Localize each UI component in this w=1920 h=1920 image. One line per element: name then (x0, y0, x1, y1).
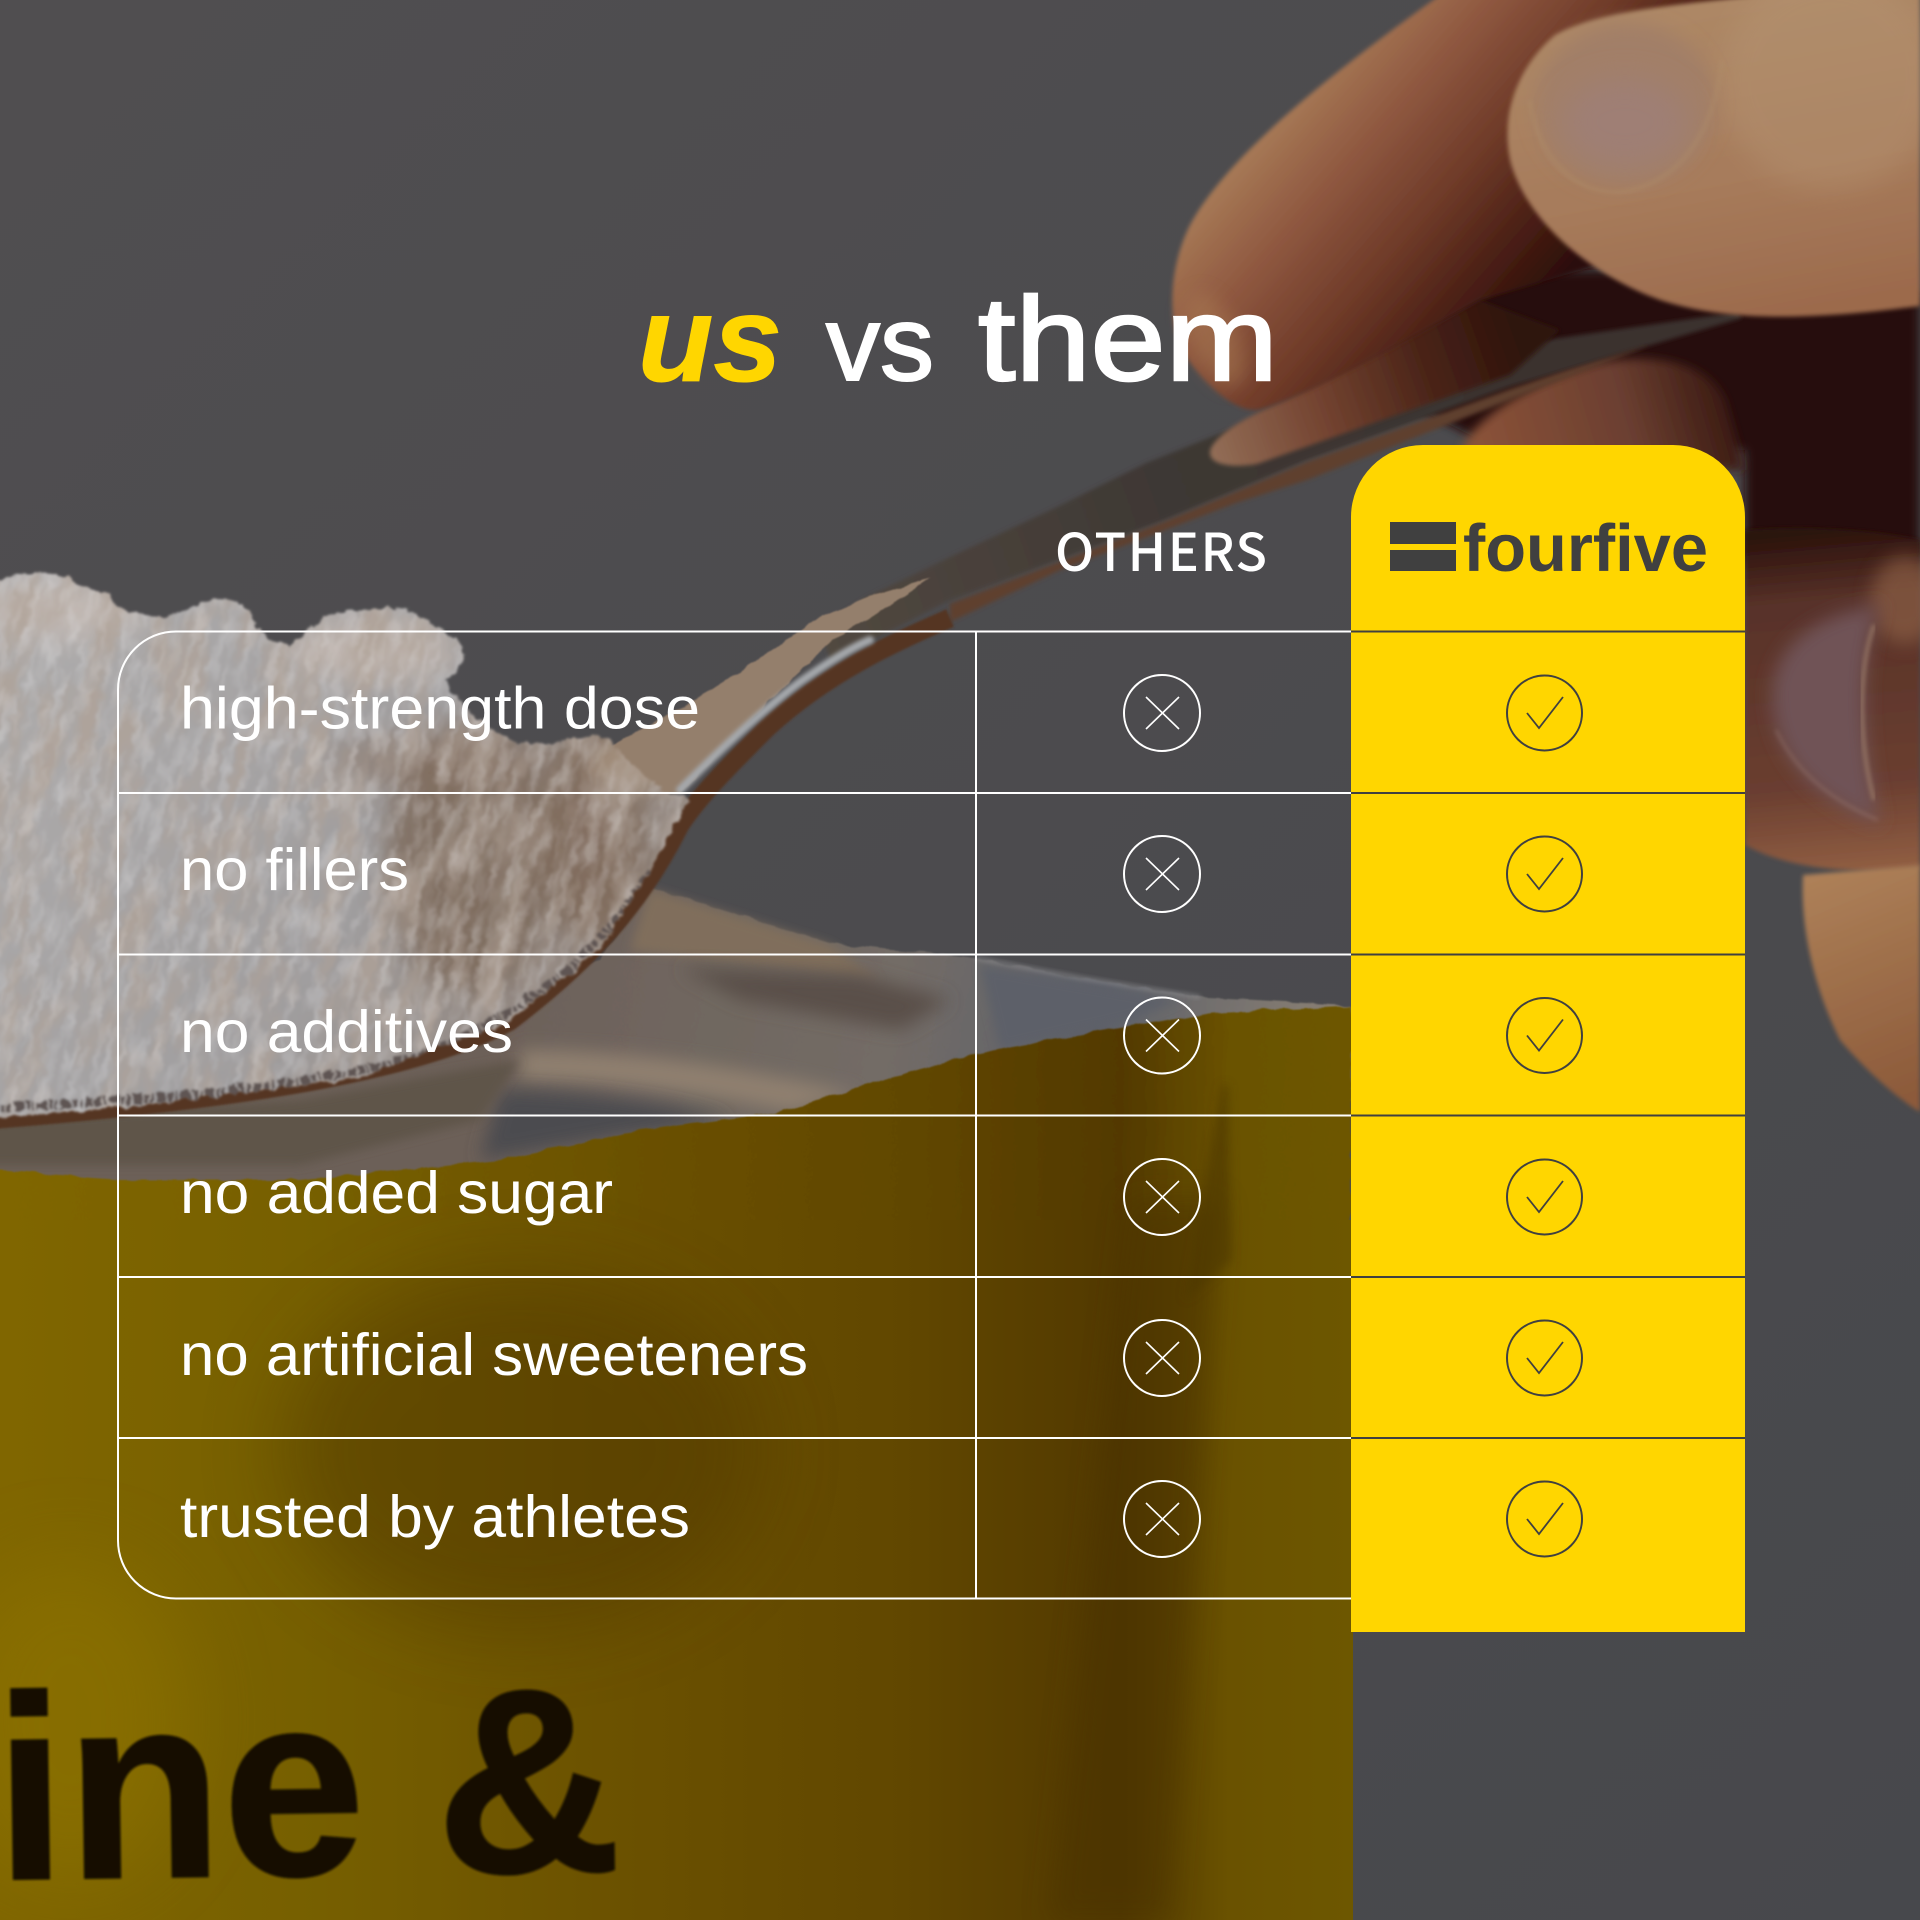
powder streaks (0, 574, 680, 1084)
yellow pouch (0, 1005, 1353, 1920)
nail rim (1530, 60, 1722, 192)
steel highlight (680, 640, 870, 790)
row: high-strength dose (180, 675, 1582, 751)
speckled powder edge (0, 870, 650, 1110)
brown patch (385, 725, 555, 995)
row: trusted by athletes (180, 1481, 1582, 1557)
handle steel (820, 312, 1742, 660)
icon: check (1507, 1320, 1582, 1396)
feature label: no fillers (180, 837, 409, 903)
torn light edge (975, 958, 1200, 997)
pouch body (0, 1220, 1353, 1920)
row: no additives (180, 998, 1582, 1074)
nail plate (1524, 11, 1726, 199)
crest glow left (0, 580, 150, 640)
index finger (1172, 0, 1800, 410)
powder on spoon neck (610, 578, 930, 800)
icon: check (1507, 836, 1582, 912)
yellow fourfive column (1351, 445, 1745, 1632)
blue grey pane (980, 965, 1180, 1050)
title (638, 271, 1278, 407)
spoon handle (820, 300, 1742, 660)
pouch shadow fold right (1050, 1200, 1220, 1920)
nail edge (1776, 730, 1878, 820)
brown patch right (535, 720, 645, 940)
middle finger behind spoon (1462, 359, 1745, 470)
icon: check (1507, 676, 1582, 750)
pouch crease (1185, 1085, 1232, 1300)
feature label: no artificial sweeteners (180, 1322, 808, 1388)
pouch shadow fold left (280, 1270, 760, 1630)
finger highlight (1871, 556, 1920, 644)
pouch opening interior (0, 887, 1351, 1190)
shadow inside the hand (1300, 270, 1920, 560)
tan neck powder (586, 740, 653, 796)
spoon rim (0, 618, 950, 1122)
dark shadow (480, 1090, 730, 1160)
comparison table frame (118, 632, 1351, 1598)
thumbnail (1524, 11, 1726, 199)
logo bars (1390, 522, 1456, 571)
column header: others: OTHERS (1055, 511, 1267, 586)
thumb lit area (1720, 0, 1920, 190)
tan crest (630, 890, 880, 980)
fingertip highlight (1172, 285, 1258, 395)
icon: cross (1124, 1159, 1200, 1235)
powder sparkle (0, 574, 682, 1116)
feature label: high-strength dose (180, 676, 700, 742)
thumb (1507, 0, 1920, 317)
lower finger (1803, 865, 1920, 1112)
right finger with nail (1745, 528, 1920, 871)
column panel (1351, 445, 1745, 1632)
interior base (0, 887, 1351, 1190)
lit band left (0, 1560, 190, 1880)
icon: check (1507, 1160, 1582, 1234)
fingertip reflection (1210, 300, 1560, 466)
crest glow (280, 618, 460, 682)
cuticle (1862, 625, 1874, 800)
row: no added sugar (180, 1159, 1582, 1235)
icon: check (1507, 998, 1582, 1073)
handle lower reflection (950, 345, 1650, 622)
title word: us: us (638, 271, 782, 407)
feature label: trusted by athletes (180, 1484, 690, 1550)
icon: cross (1124, 675, 1200, 751)
row: no artificial sweeteners (180, 1320, 1582, 1396)
nail centre (1563, 78, 1687, 166)
feature label: no additives (180, 999, 513, 1065)
tan streak (520, 1050, 860, 1112)
pouch torn top edge (0, 1005, 1351, 1260)
fourfive logo (1390, 511, 1708, 586)
powder scoop (0, 570, 954, 1130)
row: no fillers (180, 836, 1582, 912)
icon: check (1507, 1482, 1582, 1556)
title word: them: them (978, 273, 1278, 406)
title word: vs: vs (826, 285, 934, 403)
powder mass (0, 570, 691, 1120)
dark crease (680, 968, 950, 1030)
icon: cross (1124, 1320, 1200, 1396)
fingernail (1772, 605, 1880, 825)
icon: cross (1124, 1481, 1200, 1557)
feature label: no added sugar (180, 1160, 613, 1226)
brown patch upper (330, 730, 550, 790)
logo wordmark: fourfive (1463, 511, 1708, 586)
powder base (0, 560, 700, 1130)
finger body (1745, 528, 1920, 871)
icon: cross (1124, 998, 1200, 1074)
shadow below bowl (0, 1060, 520, 1165)
icon: cross (1124, 836, 1200, 912)
